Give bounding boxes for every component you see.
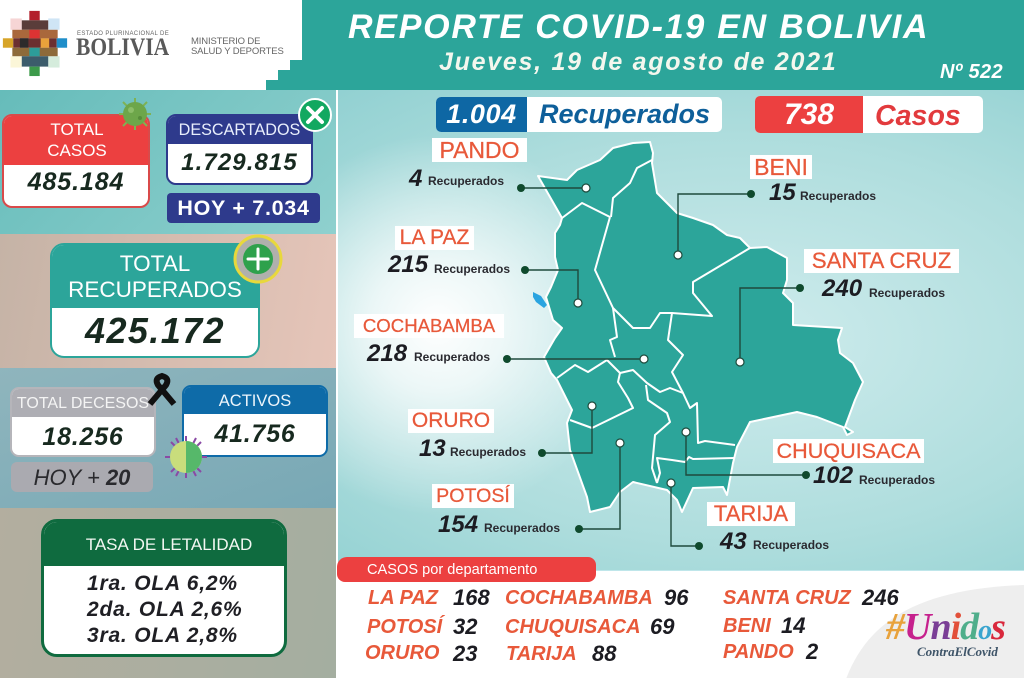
card header: RECUPERADOS [68, 277, 242, 302]
cases today pill [755, 96, 983, 133]
logo block [2, 10, 284, 76]
unit: Recuperados [414, 350, 490, 364]
unit: Recuperados [869, 286, 945, 300]
label: Chuquisaca [773, 438, 935, 489]
label: Beni [750, 154, 876, 206]
connector: Potosi [575, 439, 624, 533]
case counts: 2 [806, 639, 818, 664]
date: Jueves, 19 de agosto de 2021 [439, 48, 837, 76]
name: CHUQUISACA [776, 438, 920, 463]
map silhouette [538, 142, 863, 512]
card header: TOTAL [120, 251, 190, 276]
card value: 41.756 [214, 420, 296, 448]
unit: Recuperados [484, 521, 560, 535]
name: LA PAZ [400, 226, 469, 249]
count: 218 [367, 340, 407, 367]
card header [10, 387, 156, 417]
name: COCHABAMBA [363, 315, 495, 336]
label: Santa Cruz [804, 248, 959, 302]
connector: Tarija [667, 479, 703, 550]
card header: DESCARTADOS [179, 121, 300, 139]
icon: andean cross emblem [2, 10, 68, 76]
lethality rates: 3ra. OLA 2,8% [87, 624, 238, 647]
case counts: 32 [453, 614, 477, 639]
panel: lethality background [0, 508, 336, 678]
lethality rates [86, 572, 243, 647]
deaths today bar [11, 462, 153, 492]
recovered today pill [436, 97, 722, 132]
cases count [755, 96, 863, 133]
logo: Unidos contra el covid [886, 606, 1005, 659]
decorative logo backdrop [846, 585, 1024, 678]
connector: Chuquisaca [682, 428, 810, 479]
case counts: PANDO [723, 641, 794, 663]
case counts: ORURO [365, 642, 439, 664]
logo tagline: ContraElCovid [917, 644, 998, 659]
name: TARIJA [714, 501, 788, 526]
text: ministerio: MINISTERIO DE [191, 36, 260, 47]
lake titicaca [533, 292, 547, 308]
count: 240 [822, 275, 862, 302]
case counts: 14 [781, 613, 805, 638]
active cases card [182, 385, 328, 457]
case counts: 23 [453, 641, 477, 666]
total deaths card [10, 387, 156, 457]
name: SANTA CRUZ [812, 248, 951, 273]
icon: virus half [165, 436, 207, 478]
count: 215 [388, 251, 428, 278]
unit: Recuperados [434, 262, 510, 276]
text: ministerio [191, 36, 284, 57]
heading: cases by department: CASOS por departamento [367, 562, 537, 578]
case counts: 96 [664, 585, 688, 610]
card header [182, 385, 328, 414]
label: La Paz [388, 226, 510, 278]
count: 154 [438, 511, 478, 538]
heading: cases by department [337, 557, 596, 582]
discarded card [166, 114, 313, 185]
count: 4 [409, 165, 422, 192]
total recovered card [50, 243, 260, 358]
card header: TOTAL DECESOS [17, 395, 149, 412]
case counts: 168 [453, 585, 490, 610]
card header [2, 114, 152, 165]
icon: black ribbon [148, 372, 176, 406]
case counts: SANTA CRUZ [723, 587, 851, 609]
cases count: 738 [784, 98, 834, 131]
card header [41, 519, 287, 566]
name: ORURO [412, 409, 490, 432]
count: 102 [813, 462, 853, 489]
case counts: LA PAZ [368, 587, 438, 609]
label: Pando [408, 137, 527, 192]
label: Potosi [432, 484, 560, 538]
header white steps [266, 0, 302, 80]
label: Tarija [707, 501, 829, 555]
cases label: Casos [875, 100, 961, 132]
case counts: CHUQUISACA [505, 616, 641, 638]
count: 43 [720, 528, 747, 555]
connector: Beni [674, 190, 755, 259]
case counts: COCHABAMBA [505, 587, 653, 609]
card value: 485.184 [28, 168, 124, 196]
name: POTOSÍ [436, 485, 510, 507]
card header [50, 243, 260, 308]
card value: 18.256 [42, 423, 124, 451]
name: PANDO [439, 137, 520, 163]
label: Oruro [408, 409, 526, 462]
lethality card [41, 519, 287, 657]
panel: recovered background [0, 234, 336, 368]
recovered count [436, 97, 527, 132]
card value: 425.172 [85, 310, 225, 351]
unit: Recuperados [428, 174, 504, 188]
connector: Cochabamba [503, 355, 648, 363]
connector: Pando [517, 184, 590, 192]
connector: La Paz [521, 266, 582, 307]
case counts: POTOSÍ [367, 616, 442, 638]
lethality rates: 1ra. OLA 6,2% [87, 572, 238, 595]
panel: deaths background [0, 368, 336, 508]
connector: Santa Cruz [736, 284, 804, 366]
header band [266, 0, 1024, 90]
report number: Nº 522 [940, 61, 1003, 83]
text: Bolivia: BOLIVIA [76, 34, 169, 61]
deaths today bar: HOY + 20 [34, 465, 130, 490]
panel: right map background [338, 90, 1024, 570]
case counts: 69 [650, 614, 674, 639]
card header: CASOS [47, 141, 107, 160]
name: BENI [754, 154, 808, 180]
case counts: 246 [862, 585, 899, 610]
discarded today bar: HOY + 7.034 [177, 196, 310, 220]
case counts: TARIJA [506, 643, 577, 665]
count: 13 [419, 435, 446, 462]
count: 15 [769, 179, 796, 206]
icon: discarded X badge [298, 98, 332, 132]
panel: summary background [0, 90, 336, 234]
lethality rates: 2da. OLA 2,6% [87, 598, 243, 621]
unit: Recuperados [859, 473, 935, 487]
connector: Oruro [538, 402, 596, 457]
unit: Recuperados [450, 445, 526, 459]
case counts: 88 [592, 641, 616, 666]
unit: Recuperados [800, 189, 876, 203]
title: REPORTE COVID-19 EN BOLIVIA [348, 8, 929, 46]
card header: TOTAL [50, 120, 104, 139]
text: ministerio: SALUD Y DEPORTES [191, 46, 284, 57]
discarded today bar [167, 193, 320, 223]
recovered label: Recuperados [539, 99, 710, 129]
total cases card [2, 114, 150, 208]
card value: 1.729.815 [181, 149, 298, 176]
card header: ACTIVOS [219, 392, 291, 410]
icon: green virus [119, 98, 151, 130]
icon: plus badge [234, 234, 282, 284]
department borders [557, 160, 750, 483]
case counts: BENI [723, 615, 771, 637]
card header: TASA DE LETALIDAD [86, 535, 252, 554]
recovered count: 1.004 [446, 99, 517, 129]
logo wordmark: #Unidos [886, 606, 1005, 648]
label: Cochabamba [354, 314, 504, 367]
text: estado plurinacional: ESTADO PLURINACIONAL DE [77, 31, 169, 37]
card header [166, 114, 313, 144]
panel: cases by department [338, 570, 1024, 678]
unit: Recuperados [753, 538, 829, 552]
